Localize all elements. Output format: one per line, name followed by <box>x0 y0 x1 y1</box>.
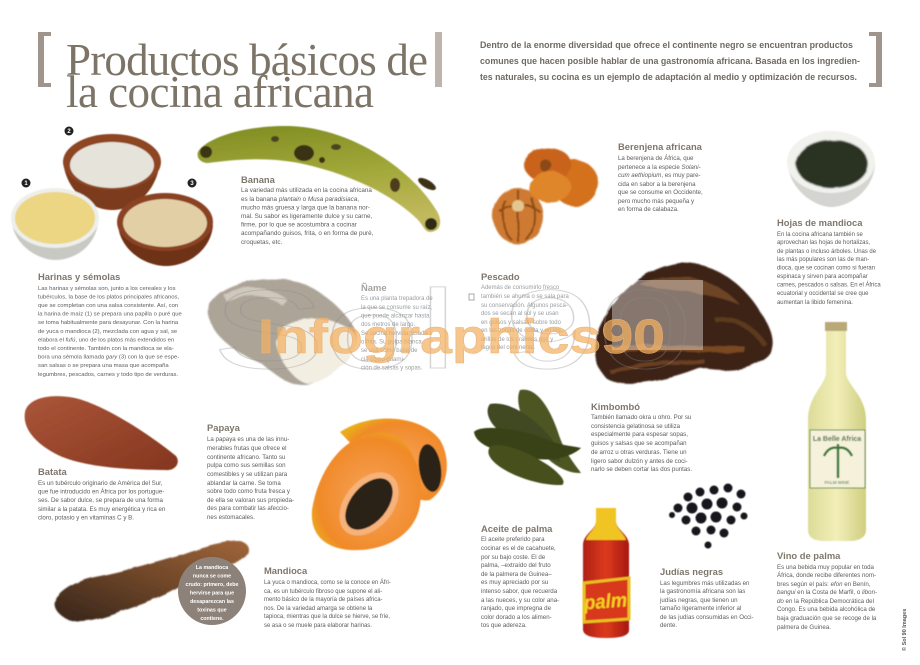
callout: mandioca warning: crudo: primero, debe <box>186 582 239 588</box>
text: Aceite de palma: ranjado, que impregna de <box>481 605 552 612</box>
text: Vino de palma: bres según el país: efon en Benín, <box>777 581 871 588</box>
image: palm oil bottle: palm <box>582 590 628 615</box>
marker 3 <box>188 178 196 188</box>
title: la cocina africana <box>66 67 374 117</box>
text: Mandioca: mento básico de la mayoría de países africa- <box>264 597 383 603</box>
text: Pescado: también se ahuma o se sala para <box>481 294 569 300</box>
heading: Banana: La variedad más utilizada en la cocina africana <box>241 187 372 194</box>
text: Papaya: pulpa como sus semillas son <box>207 462 286 469</box>
image: flour bowls <box>11 134 213 266</box>
watermark outline: Sol 90 <box>212 267 692 392</box>
text: Kimbombó: guisos y salsas que se acompañan <box>591 440 687 447</box>
text: Mandioca <box>264 565 391 629</box>
text: Kimbombó: Kimbombó <box>591 401 640 412</box>
text: Hojas de mandioca: de plantas o incluso árboles. Unas de <box>777 249 877 255</box>
text: Harinas y sémolas: de yuca o mandioca (2), mezclada con agua y sal, se <box>38 329 178 335</box>
text: Berenjena africana: pertenece a la especie Solani- <box>618 164 701 171</box>
text: Mandioca: Mandioca <box>264 565 308 576</box>
title: Productos básicos de <box>66 35 428 85</box>
text: Harinas y sémolas: san salsas o se prepara una masa que acompaña <box>38 363 169 369</box>
text: Aceite de palma: tos que adereza. <box>481 622 527 629</box>
text: Harinas y sémolas: todo el continente. También con la mandioca se ela- <box>38 346 174 352</box>
title <box>66 35 428 117</box>
text: Harinas y sémolas: se toma habitualmente para desayunar. Con la harina <box>38 320 179 326</box>
text: Hojas de mandioca: espinaca y sirven para acompañar <box>777 274 868 280</box>
callout: mandioca warning: La mandioca <box>196 565 228 571</box>
text: Vino de palma: Vino de palma <box>777 550 841 561</box>
text: Papaya: ablandar la carne. Se toma <box>207 480 281 487</box>
text: Batata: Es un tubérculo originario de América del Sur, <box>38 480 163 487</box>
text: Mandioca: nos. De la variedad amarga se obtiene la <box>264 606 373 612</box>
image: bowl of cassava leaves <box>787 131 875 207</box>
image: fish <box>594 263 773 383</box>
text: Judías negras: la gastronomía africana son las <box>660 588 745 595</box>
text: Ñame: que puede alcanzar hasta <box>361 314 430 320</box>
text: Berenjena africana: Berenjena africana <box>618 141 703 152</box>
image: palm wine bottle: La Belle Africa <box>813 436 861 443</box>
text: Pescado <box>481 271 569 351</box>
text: Aceite de palma: palma, –extraído del fruto <box>481 562 551 569</box>
left title bracket <box>38 32 51 87</box>
text: Ñame: Es una planta trepadora de <box>361 296 433 302</box>
image: palm oil bottle <box>582 508 629 638</box>
intro text: tes naturales, su cocina es un ejemplo de adaptación al medio y optimización de recursos. <box>480 72 857 82</box>
text: Vino de palma: do en la República Democrática del <box>777 598 874 605</box>
text: Harinas y sémolas: legumbres, pescados, carnes y todo tipo de verduras. <box>38 372 179 378</box>
text: Papaya: des para combatir las afeccio- <box>207 505 289 512</box>
text: Judías negras: Las legumbres más utilizadas en <box>660 580 750 587</box>
intro text: comunes que hacen posible hablar de una gastronomía africana. Basada en los ingredien- <box>480 56 860 66</box>
text: Batata: similar a la patata. Es muy energética y rica en <box>38 506 166 513</box>
callout: mandioca warning: hervirse para que <box>190 590 234 596</box>
text: Pescado: dos se secan al sol y se usan <box>481 311 559 317</box>
text: Ñame: Se cocina hervida, asada <box>361 331 428 337</box>
heading: Banana <box>241 174 374 246</box>
text: Vino de palma <box>777 550 877 631</box>
text: Papaya: La papaya es una de las innu- <box>207 436 289 443</box>
text: Batata: cloro, potasio y en vitaminas C y B. <box>38 514 134 522</box>
text: Vino de palma: Congo. Es una bebida alcohólica de <box>777 606 876 613</box>
text: Harinas y sémolas: bora una sémola llamada gary (3) con la que se espe- <box>38 354 179 360</box>
text: Judías negras: Judías negras <box>660 566 723 577</box>
text: Papaya <box>207 422 294 521</box>
text: Pescado: lagos del continente. <box>481 345 536 351</box>
marker 1 <box>22 178 30 188</box>
heading: Banana: mal. Su sabor es ligeramente dulce y su carne, <box>241 213 373 220</box>
text: Papaya: merables frutas que ofrece el <box>207 445 287 452</box>
marker 2 <box>64 126 74 136</box>
image: sweet potato <box>25 396 178 470</box>
heading: Banana: acompañando guisos, frita, o en forma de puré, <box>241 230 374 237</box>
callout: mandioca warning <box>178 557 246 625</box>
text: Berenjena africana: en forma de calabaza. <box>618 206 679 213</box>
credit: © Sol 90 Images <box>901 609 908 651</box>
text: Kimbombó: narlo se deben cortar las dos puntas. <box>591 466 692 473</box>
text: Hojas de mandioca: carnes, pescados o salsas. En el África <box>777 282 881 288</box>
text: Batata: ses. De sabor dulce, se prepara de una forma <box>38 497 164 504</box>
text: Judías negras: dente. <box>660 622 677 629</box>
intro text: Dentro de la enorme diversidad que ofrece el continente negro se encuentran productos <box>480 40 853 50</box>
image: okra <box>474 390 581 485</box>
text: Papaya: Papaya <box>207 422 241 433</box>
text: Harinas y sémolas: tubérculos, la base de los platos principales africanos, <box>38 294 179 300</box>
text: Aceite de palma: color dorado a los alimen- <box>481 614 552 621</box>
text: Pescado: en las zonas de costa y en las <box>481 328 561 334</box>
text: Judías negras: tamaño ligeramente inferior al <box>660 605 741 612</box>
marker 1: 1 <box>24 181 28 187</box>
text: Hojas de mandioca: En la cocina africana también se <box>777 232 864 238</box>
text: Aceite de palma: cocinar es el de cacahuete, <box>481 545 556 552</box>
text: Vino de palma: bangui en la Costa de Marfil, o libon- <box>777 589 877 596</box>
text: Batata: que fue introducido en África por los portugue- <box>38 488 164 496</box>
text: Vino de palma: Es una bebida muy popular en toda <box>777 564 875 571</box>
text: Aceite de palma: de la palmera de Guinea– <box>481 571 552 578</box>
fish highlight panel <box>612 280 703 350</box>
image: papaya <box>312 419 447 550</box>
text: Mandioca: se asa o se muele para elaborar harinas. <box>264 623 372 629</box>
text: Batata: Batata <box>38 466 67 477</box>
text: Papaya: continente africano. Tanto su <box>207 454 285 461</box>
callout: mandioca warning: desaparezcan las <box>190 599 234 605</box>
callout: mandioca warning: toxinas que <box>197 608 227 614</box>
text: Aceite de palma <box>481 523 559 629</box>
text: Harinas y sémolas: Harinas y sémolas <box>38 271 120 282</box>
text: Ñame: la que se consume su raíz, <box>361 305 432 311</box>
text: Ñame: se usa como base de <box>361 348 418 354</box>
text: Kimbombó: de arroz u otras verduras. Tiene un <box>591 449 687 456</box>
text: Pescado: Pescado <box>481 271 520 282</box>
image: black beans <box>669 484 748 548</box>
text: Aceite de palma: es muy apreciado por su <box>481 579 548 586</box>
text: Mandioca: La yuca o mandioca, como se la conoce en Áfri- <box>264 579 391 586</box>
text: Pescado: Además de consumirlo fresco <box>481 285 560 291</box>
image: palm wine bottle: PALM WINE <box>825 480 849 485</box>
text: Berenjena africana <box>618 141 703 213</box>
text: Hojas de mandioca: aumentan la libido femenina. <box>777 300 853 306</box>
image: berenjena africana <box>493 148 598 244</box>
callout: mandioca warning: contiene. <box>200 616 224 622</box>
text: Kimbombó <box>591 401 692 473</box>
text: Judías negras <box>659 566 754 629</box>
text: Hojas de mandioca: dioca, que se cocinan como si fueran <box>777 266 875 272</box>
right bracket <box>869 32 882 87</box>
text: Ñame: ción de salsas y sopas. <box>361 366 423 372</box>
heading: Banana: firme, por lo que se acostumbra a cocinar <box>241 222 357 228</box>
text: Papaya: de ella se valoran sus propieda- <box>207 497 294 504</box>
bowl 1 <box>11 188 99 260</box>
image: banana <box>198 126 440 232</box>
text: Harinas y sémolas: la harina de maíz (1) se prepara una papilla o puré que <box>38 312 182 318</box>
text: Aceite de palma: El aceite preferido para <box>481 536 545 543</box>
text: Papaya: sobre todo como fruta fresca y <box>207 488 291 495</box>
title divider bar <box>435 32 442 87</box>
text: Harinas y sémolas: que se completan con una salsa consistente. Así, con <box>38 303 178 309</box>
text: Vino de palma: África, donde recibe diferentes nom- <box>777 572 876 579</box>
intro text <box>480 40 860 82</box>
heading: Banana: es la banana plantain o Musa paradisiaca, <box>241 196 359 203</box>
heading: Banana: Banana <box>241 174 276 185</box>
text: Berenjena africana: que se consume en Occidente, <box>618 189 703 196</box>
text: Harinas y sémolas: Las harinas y sémolas son, junto a los cereales y los <box>38 286 176 292</box>
marker 2: 2 <box>67 129 71 135</box>
text: Aceite de palma: por su bajo coste. El de <box>481 554 546 561</box>
text: Aceite de palma: a las nueces, y su color ana- <box>481 597 559 604</box>
icon: small checkbox <box>469 294 474 300</box>
text: Papaya: comestibles y se utilizan para <box>207 471 288 478</box>
marker 3: 3 <box>190 181 194 187</box>
image: palm wine bottle <box>808 322 866 541</box>
text: Aceite de palma: Aceite de palma <box>481 523 553 534</box>
text: Ñame: o frita. Su pulpa blanca <box>361 340 422 346</box>
image: cassava root <box>54 541 249 622</box>
text: Ñame: Ñame <box>361 282 387 293</box>
text: Ñame: dos metros de largo. <box>361 322 415 328</box>
text: Berenjena africana: La berenjena de África, que <box>618 155 694 162</box>
heading: Banana: croquetas, etc. <box>241 239 283 246</box>
heading: Banana: mucho más gruesa y larga que la banana nor- <box>241 204 370 212</box>
text: Vino de palma: baja graduación que se recoge de la <box>777 615 877 622</box>
text: Judías negras: de las judías consumidas en Occi- <box>660 614 754 621</box>
text: Harinas y sémolas: elabora el fufú, uno de los platos más extendidos en <box>38 338 174 344</box>
image: ñame <box>209 279 357 385</box>
text: Kimbombó: especialmente para espesar sopas, <box>591 431 688 438</box>
text: Papaya: nes estomacales. <box>207 514 255 521</box>
bowl 2 <box>63 134 161 210</box>
callout: mandioca warning: nunca se come <box>193 574 231 580</box>
text: Berenjena africana: pero mucho más pequeña y <box>618 198 695 205</box>
text: Hojas de mandioca <box>777 217 881 306</box>
text: Berenjena africana: cum aethiopium, es muy pare- <box>618 172 701 179</box>
text: Kimbombó: ligero sabor dulzón y antes de coci- <box>591 458 688 465</box>
text: Hojas de mandioca: aprovechan las hojas de hortalizas, <box>777 240 870 246</box>
text: Berenjena africana: cida en sabor a la berenjena <box>618 181 696 188</box>
text: Harinas y sémolas <box>38 271 182 378</box>
text: Judías negras: judías negras, que tienen un <box>659 597 738 604</box>
text: Mandioca: tapioca, mientras que la dulce se hierve, se fríe, <box>264 614 390 620</box>
text: Kimbombó: También llamado okra u ohro. Por su <box>591 414 691 421</box>
text: Batata <box>38 466 166 522</box>
text: Pescado: orillas de los grandes ríos y <box>481 337 553 343</box>
text: Pescado: en guisos y salsas, sobre todo <box>481 320 562 326</box>
text: Vino de palma: palmera de Guinea. <box>777 624 831 631</box>
text: Ñame <box>361 282 433 372</box>
text: Aceite de palma: intenso sabor, que recuerda <box>481 588 558 595</box>
bowl 3 <box>117 193 213 266</box>
text: Mandioca: ca, es un tubérculo fibroso que supone el ali- <box>264 589 382 595</box>
watermark: Infographics90 <box>258 311 665 364</box>
text: Kimbombó: consistencia gelatinosa se utiliza <box>591 423 681 430</box>
text: Pescado: su conservación. Algunos pesca- <box>481 303 568 309</box>
text: Ñame: cia como guarni- <box>361 357 405 363</box>
text: Hojas de mandioca: las más populares son las de man- <box>777 257 869 263</box>
text: Hojas de mandioca: ecuatorial y occidental se cree que <box>777 291 869 297</box>
text: Hojas de mandioca: Hojas de mandioca <box>777 217 863 228</box>
